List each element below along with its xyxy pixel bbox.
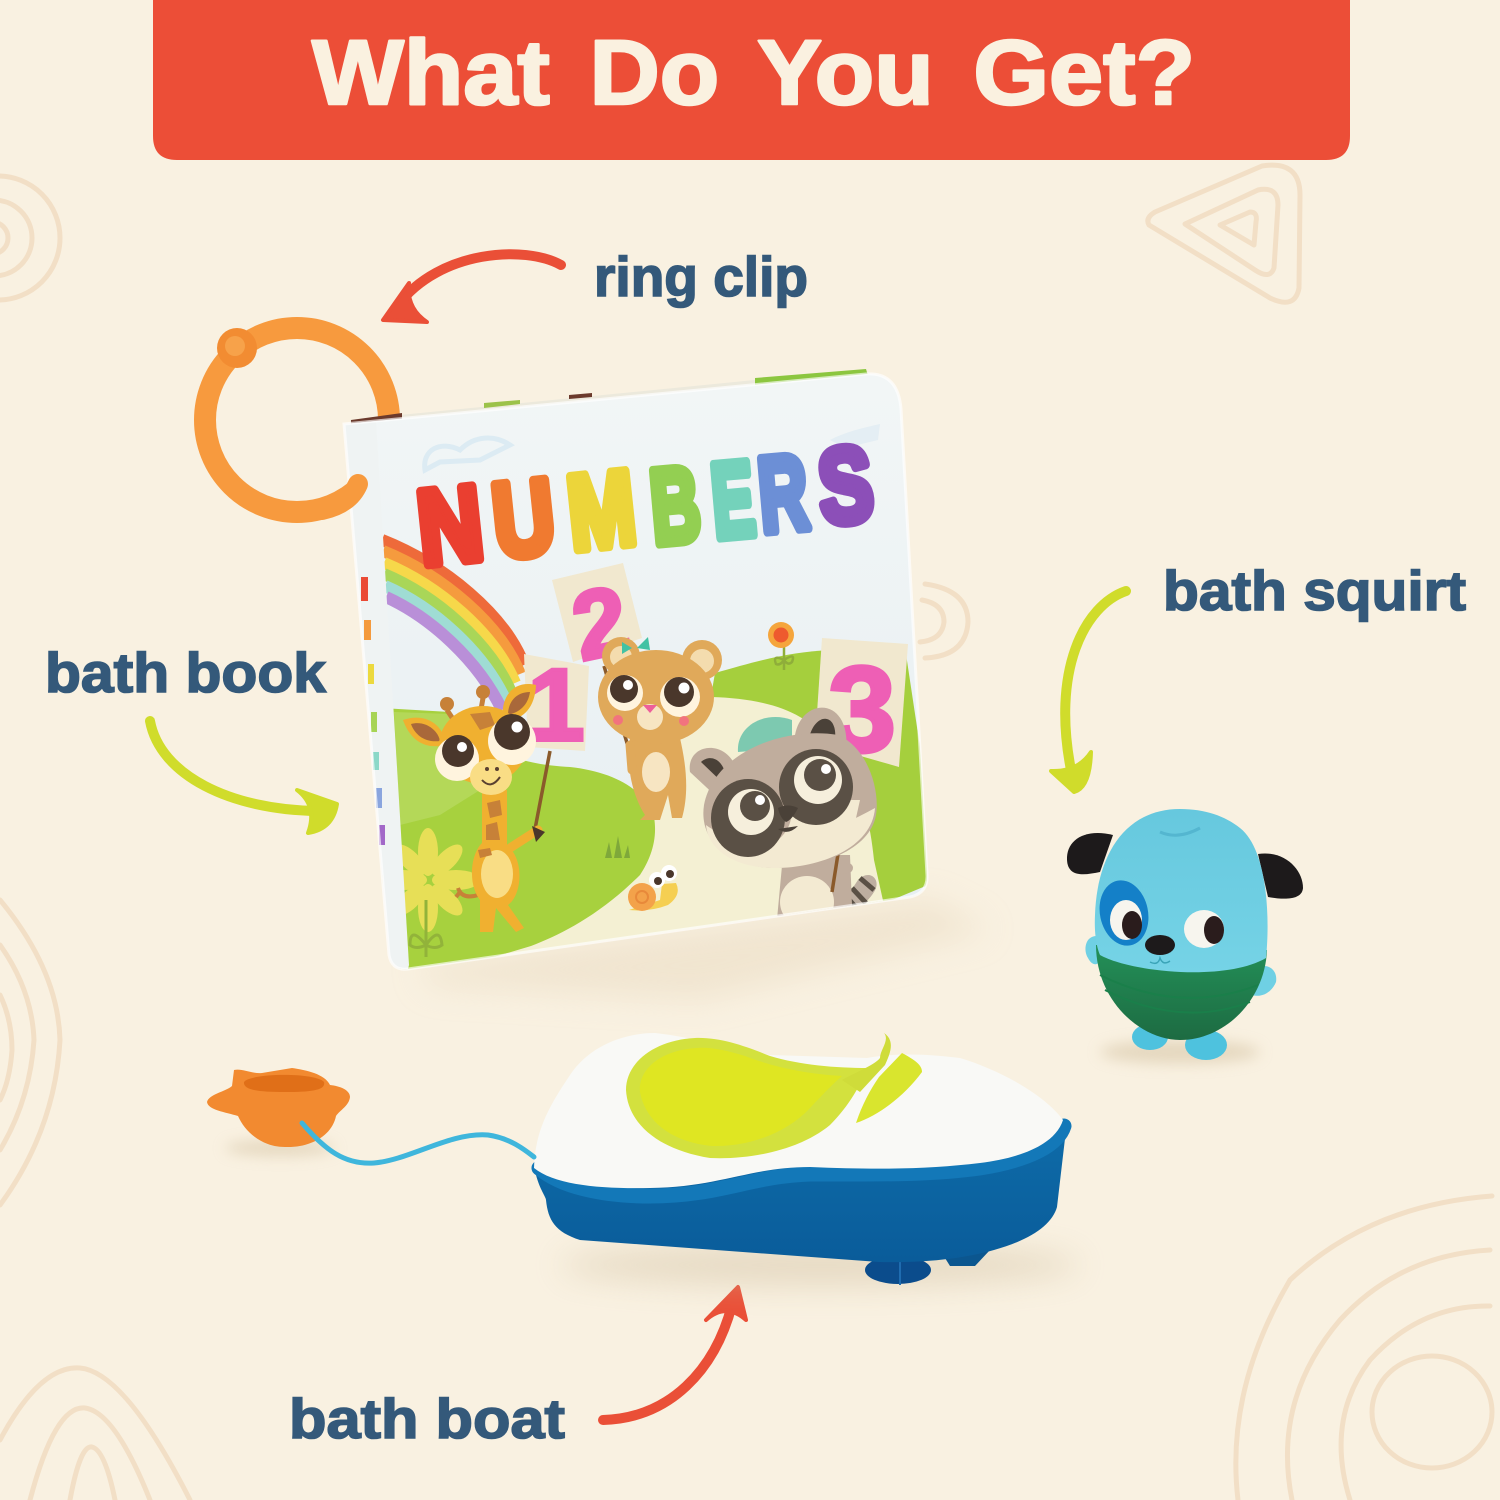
raccoon: [690, 708, 877, 930]
right hill: [712, 650, 927, 908]
top flower: [768, 622, 794, 670]
spine title colour marks: [361, 577, 385, 845]
rainbow: [382, 540, 524, 710]
number card 1: 1: [528, 648, 584, 762]
arrow: to ring clip: [383, 254, 561, 322]
grass tufts: [605, 836, 630, 858]
NUMBERS title on book: E: [707, 439, 759, 561]
bath squirt dog: [1067, 809, 1303, 1060]
NUMBERS title on book: [412, 424, 877, 588]
raccoon ears: [690, 748, 732, 790]
snail: [628, 865, 678, 911]
number card 3: 3: [828, 641, 896, 777]
bear: [598, 637, 722, 820]
label: bath squirt: bath squirt: [1163, 559, 1466, 622]
NUMBERS title on book: R: [754, 432, 813, 555]
dog ears: [1067, 833, 1303, 899]
dog green body: [1096, 945, 1267, 1040]
title banner: [153, 0, 1350, 160]
NUMBERS title on book: U: [487, 457, 560, 581]
boat blue hull: [536, 1130, 1066, 1262]
left hill: [393, 708, 656, 970]
number card 2: 2: [563, 566, 638, 681]
yellow flower: [379, 828, 480, 957]
book cover gloss: [344, 374, 927, 969]
orange float: [207, 1068, 350, 1147]
title text: What Do You Get?: [312, 22, 1195, 124]
boat hull rim: [539, 1126, 1064, 1196]
boat cord: [302, 1123, 534, 1163]
ring clip front segment: [322, 484, 358, 510]
dog arms: [1085, 936, 1276, 996]
label: bath book: bath book: [45, 641, 327, 704]
raccoon hat: [738, 717, 792, 752]
raccoon tail: [852, 875, 877, 904]
dog feet: [1132, 1024, 1227, 1060]
giraffe: [403, 684, 550, 932]
raccoon head: [703, 733, 877, 868]
ring clip: [205, 328, 389, 512]
arrow: to bath squirt: [1051, 591, 1126, 792]
NUMBERS title on book: N: [412, 462, 488, 588]
NUMBERS title on book: B: [646, 444, 705, 567]
boat propeller: [865, 1250, 990, 1285]
number card 2: [552, 563, 642, 662]
dog eye patch and eyes: [1094, 876, 1224, 950]
NUMBERS title on book: S: [814, 424, 877, 546]
NUMBERS title on book: M: [562, 448, 641, 572]
book spine: [344, 421, 409, 969]
soft product shadows: [225, 900, 1260, 1285]
dog nose and mouth: [1145, 935, 1175, 963]
bath book: [344, 369, 940, 985]
label: ring clip: ring clip: [594, 245, 808, 308]
boat white deck: [534, 1033, 1063, 1188]
label: bath boat: bath boat: [289, 1387, 565, 1450]
raccoon nose: [778, 806, 798, 832]
raccoon body: [778, 855, 852, 916]
dog head: [1095, 809, 1268, 972]
boat lime cockpit: [626, 1033, 922, 1158]
book cover artwork: [379, 424, 940, 985]
bath boat: [207, 1033, 1066, 1285]
arrow: to bath book: [150, 721, 337, 833]
raccoon eyes: [711, 779, 785, 857]
path: [498, 697, 883, 956]
arrow: to bath boat: [603, 1287, 746, 1420]
